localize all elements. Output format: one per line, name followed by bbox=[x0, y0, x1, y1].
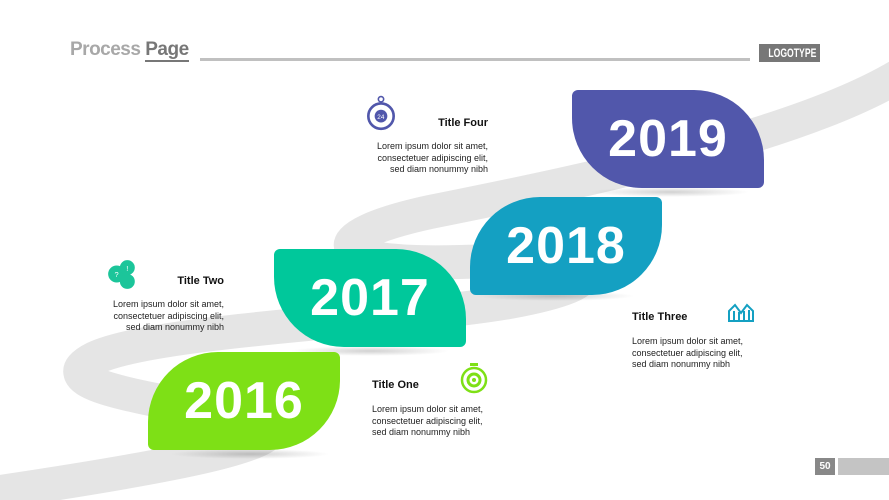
item: Title Four: Lorem ipsum dolor sit amet, bbox=[377, 141, 488, 151]
year 2018: 2018 bbox=[506, 217, 626, 275]
item: Title Three: consectetuer adipiscing elit, bbox=[632, 348, 743, 358]
item: Title Two: Lorem ipsum dolor sit amet, bbox=[113, 299, 224, 309]
icon: chat bubbles: ? bbox=[115, 270, 119, 279]
header line bbox=[200, 58, 750, 61]
icon: chat bubbles bbox=[108, 260, 135, 289]
year 2016 bbox=[148, 352, 340, 450]
item: Title One: Title One bbox=[372, 379, 419, 391]
icon: gear stopwatch bbox=[460, 363, 488, 394]
year 2016: 2016 bbox=[184, 372, 304, 430]
item: Title One: consectetuer adipiscing elit, bbox=[372, 416, 483, 426]
item: Title Two: consectetuer adipiscing elit, bbox=[113, 310, 224, 320]
year 2019: 2019 bbox=[608, 110, 728, 168]
year 2019 bbox=[572, 90, 764, 188]
icon: 24h stopwatch bbox=[367, 96, 395, 130]
logo bbox=[759, 44, 820, 62]
shadows bbox=[170, 449, 330, 459]
page number bbox=[815, 458, 889, 475]
item: Title Three: Title Three bbox=[632, 311, 687, 323]
item: Title One bbox=[372, 363, 488, 437]
item: Title Three: Lorem ipsum dolor sit amet, bbox=[632, 336, 743, 346]
item: Title One: sed diam nonummy nibh bbox=[372, 427, 470, 437]
item: Title One: Lorem ipsum dolor sit amet, bbox=[372, 404, 483, 414]
item: Title Three: sed diam nonummy nibh bbox=[632, 359, 730, 369]
icon: chat bubbles: ! bbox=[126, 264, 128, 273]
year 2017: 2017 bbox=[310, 269, 430, 327]
icon: 24h stopwatch: 24 bbox=[377, 114, 385, 121]
icon: bar chart bbox=[728, 304, 754, 322]
item: Title Three bbox=[632, 304, 754, 369]
item: Title Four: sed diam nonummy nibh bbox=[390, 164, 488, 174]
item: Title Four bbox=[367, 96, 488, 174]
year 2018 bbox=[470, 197, 662, 295]
page number: 50 bbox=[819, 461, 831, 472]
item: Title Two: Title Two bbox=[177, 275, 224, 287]
title: Process Page: Process Page bbox=[70, 39, 189, 60]
item: Title Two bbox=[108, 260, 224, 332]
item: Title Four: consectetuer adipiscing elit, bbox=[377, 152, 488, 162]
year 2017 bbox=[274, 249, 466, 347]
logo: LOGOTYPE bbox=[768, 46, 816, 60]
item: Title Two: sed diam nonummy nibh bbox=[126, 322, 224, 332]
header bbox=[70, 39, 820, 62]
item: Title Four: Title Four bbox=[438, 117, 488, 129]
